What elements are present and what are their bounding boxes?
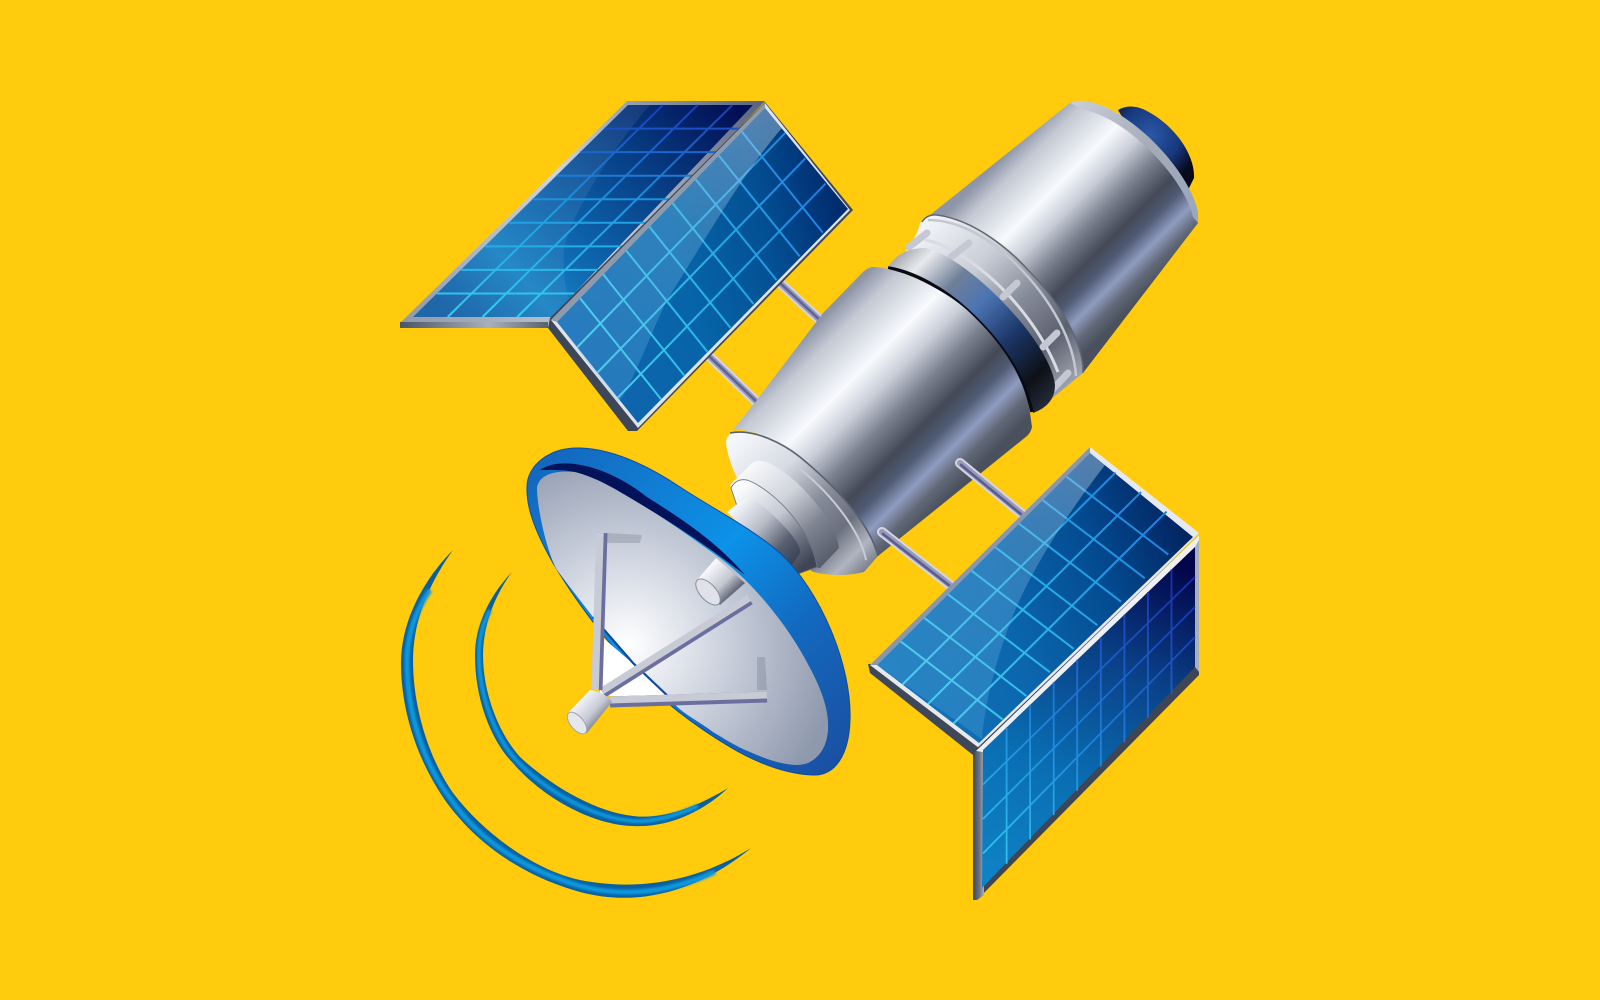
solar panel D: lower face [973, 535, 1199, 900]
dish inner surface [537, 472, 828, 765]
rods joining upper solar wing to body [710, 283, 822, 405]
strut shadows [607, 533, 767, 690]
lower body cylinder [733, 267, 1032, 556]
dish antenna [527, 448, 850, 775]
collar bolts [909, 233, 1068, 389]
strut to lower dish [610, 695, 767, 702]
solar panel A: rear face [400, 101, 767, 328]
stepped mount tier 1 [730, 461, 839, 568]
feed horn [691, 558, 745, 609]
dish neck [727, 498, 800, 568]
signal wave: outer arc [401, 550, 751, 898]
stepped mount tier 2 [731, 480, 817, 575]
upper cylinder end band [1070, 101, 1198, 223]
bright reflection [600, 637, 670, 700]
flange [726, 431, 878, 575]
solar panel B: front face [548, 102, 853, 431]
dish lower edge [593, 617, 672, 700]
end cap dome [1118, 106, 1194, 190]
strut to rim [602, 598, 750, 693]
strut hub [564, 690, 612, 737]
solar panel C: top face [868, 447, 1199, 755]
blue joint band [888, 248, 1055, 413]
strut to upper dish [595, 533, 602, 690]
dish rim [527, 448, 850, 775]
rods joining lower solar wing to body [882, 463, 1022, 586]
dish shadow crescent [540, 463, 745, 575]
signal wave: inner arc [475, 572, 728, 826]
upper body cylinder [930, 101, 1198, 373]
collar ring with pegs [906, 215, 1083, 400]
